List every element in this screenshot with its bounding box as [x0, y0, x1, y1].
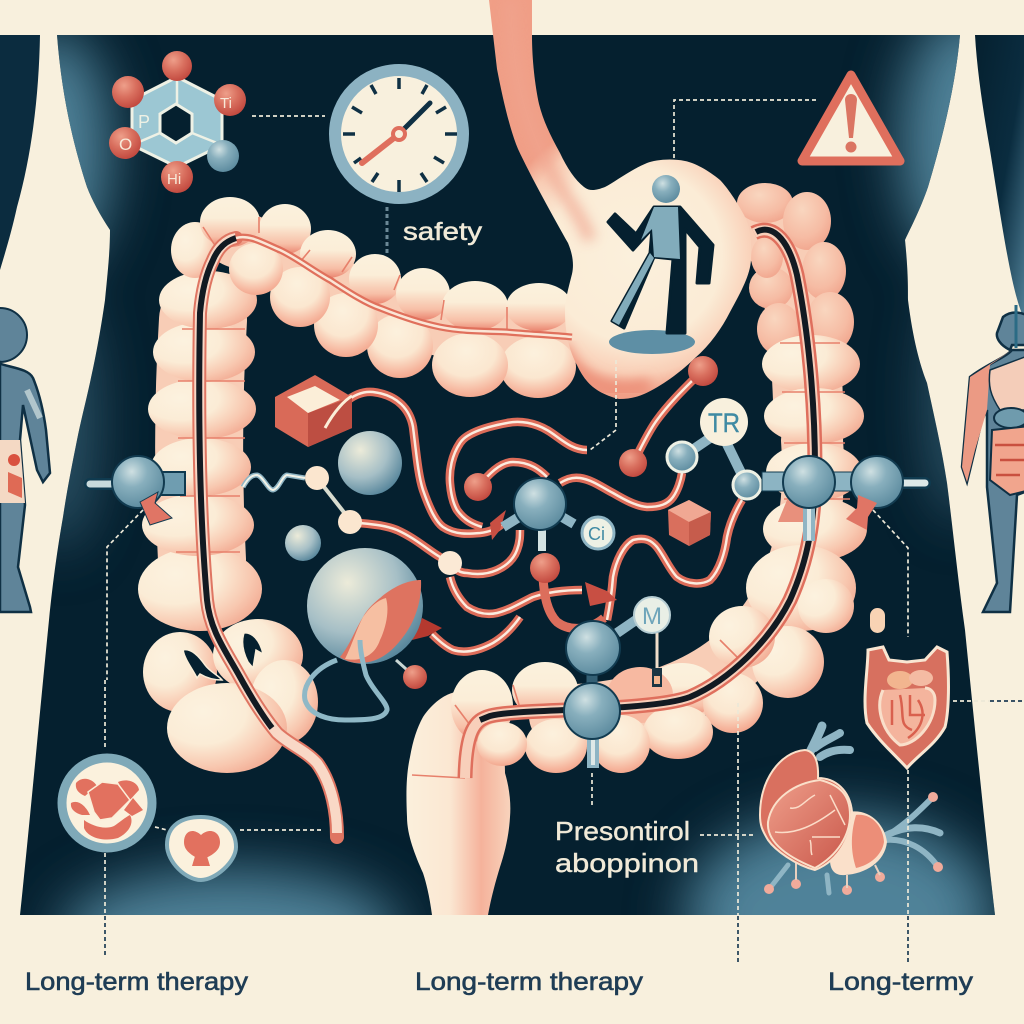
heart organ illustration	[760, 726, 943, 895]
transverse colon lower lobes	[229, 243, 576, 398]
bottom label center: Long-term therapy	[415, 968, 644, 996]
bottom label right: Long-termy	[828, 968, 974, 996]
central pathways	[325, 370, 742, 652]
heart vessels	[770, 726, 940, 893]
rectum	[406, 691, 510, 915]
colon	[138, 0, 867, 837]
heart end caps	[764, 792, 943, 895]
transverse colon upper lobes	[200, 197, 572, 331]
sphere small	[285, 525, 321, 561]
right colon tube	[465, 230, 815, 778]
Presontirol aboppinon label	[555, 816, 699, 878]
lower molecule: M	[642, 603, 662, 630]
small pill	[870, 608, 885, 633]
squiggle connector	[243, 475, 305, 490]
warning triangle icon	[802, 75, 900, 161]
left figure organ patch	[0, 440, 25, 503]
bottom label left: Long-term therapy	[25, 968, 249, 996]
safety label: safety	[403, 218, 483, 246]
lower colon lobes	[451, 662, 763, 773]
left dumbbell connector	[90, 456, 185, 525]
TR molecule	[667, 398, 761, 499]
right dark side panel	[975, 35, 1024, 318]
molecule center: Ci	[588, 524, 605, 544]
right figure organs	[962, 350, 1012, 482]
thick red link	[543, 577, 604, 628]
dashed leader lines	[105, 100, 1024, 965]
left colon tube	[199, 237, 572, 837]
heart body	[760, 750, 852, 870]
chemical hexagon icon: O	[119, 135, 132, 154]
right side body figure	[962, 305, 1024, 612]
TR molecule: TR	[708, 408, 740, 438]
red cube right	[668, 500, 711, 546]
chemical hexagon icon: Ti	[220, 95, 232, 112]
Presontirol aboppinon label: aboppinon	[555, 848, 699, 878]
connector chain	[305, 466, 462, 575]
right dumbbell connector	[762, 456, 925, 541]
walking person icon	[608, 175, 713, 354]
lobe seams	[176, 217, 850, 778]
chemical hexagon icon	[109, 51, 246, 193]
lower molecule	[564, 597, 670, 768]
Presontirol aboppinon label: Presontirol	[555, 816, 690, 846]
descending colon lobes	[709, 183, 867, 698]
chemical hexagon icon: Hi	[167, 171, 181, 188]
esophagus and stomach	[489, 0, 751, 399]
molecule center	[503, 478, 614, 551]
lower-left inset circle large	[62, 758, 152, 848]
heart atrium	[830, 811, 887, 875]
intestine shield icon	[865, 647, 948, 768]
colon backing bands	[199, 235, 813, 716]
red arrow heads	[412, 510, 617, 640]
heart ventricle	[768, 780, 850, 868]
red cube left	[275, 375, 352, 447]
cecum dark slits	[183, 633, 263, 680]
arm highlight	[27, 390, 40, 418]
clock icon	[335, 70, 463, 198]
red nodes	[464, 356, 718, 583]
left side body figure	[0, 308, 50, 612]
tube loop	[305, 640, 387, 720]
large capsule sphere	[305, 548, 427, 720]
ascending colon lobes	[138, 222, 262, 631]
chemical hexagon icon: P	[138, 112, 150, 132]
left dark side panel	[0, 35, 40, 270]
intestines in shield	[880, 670, 935, 745]
lower-left inset circle small	[167, 817, 236, 880]
cecum lobes	[143, 619, 318, 773]
sphere large	[338, 431, 402, 495]
